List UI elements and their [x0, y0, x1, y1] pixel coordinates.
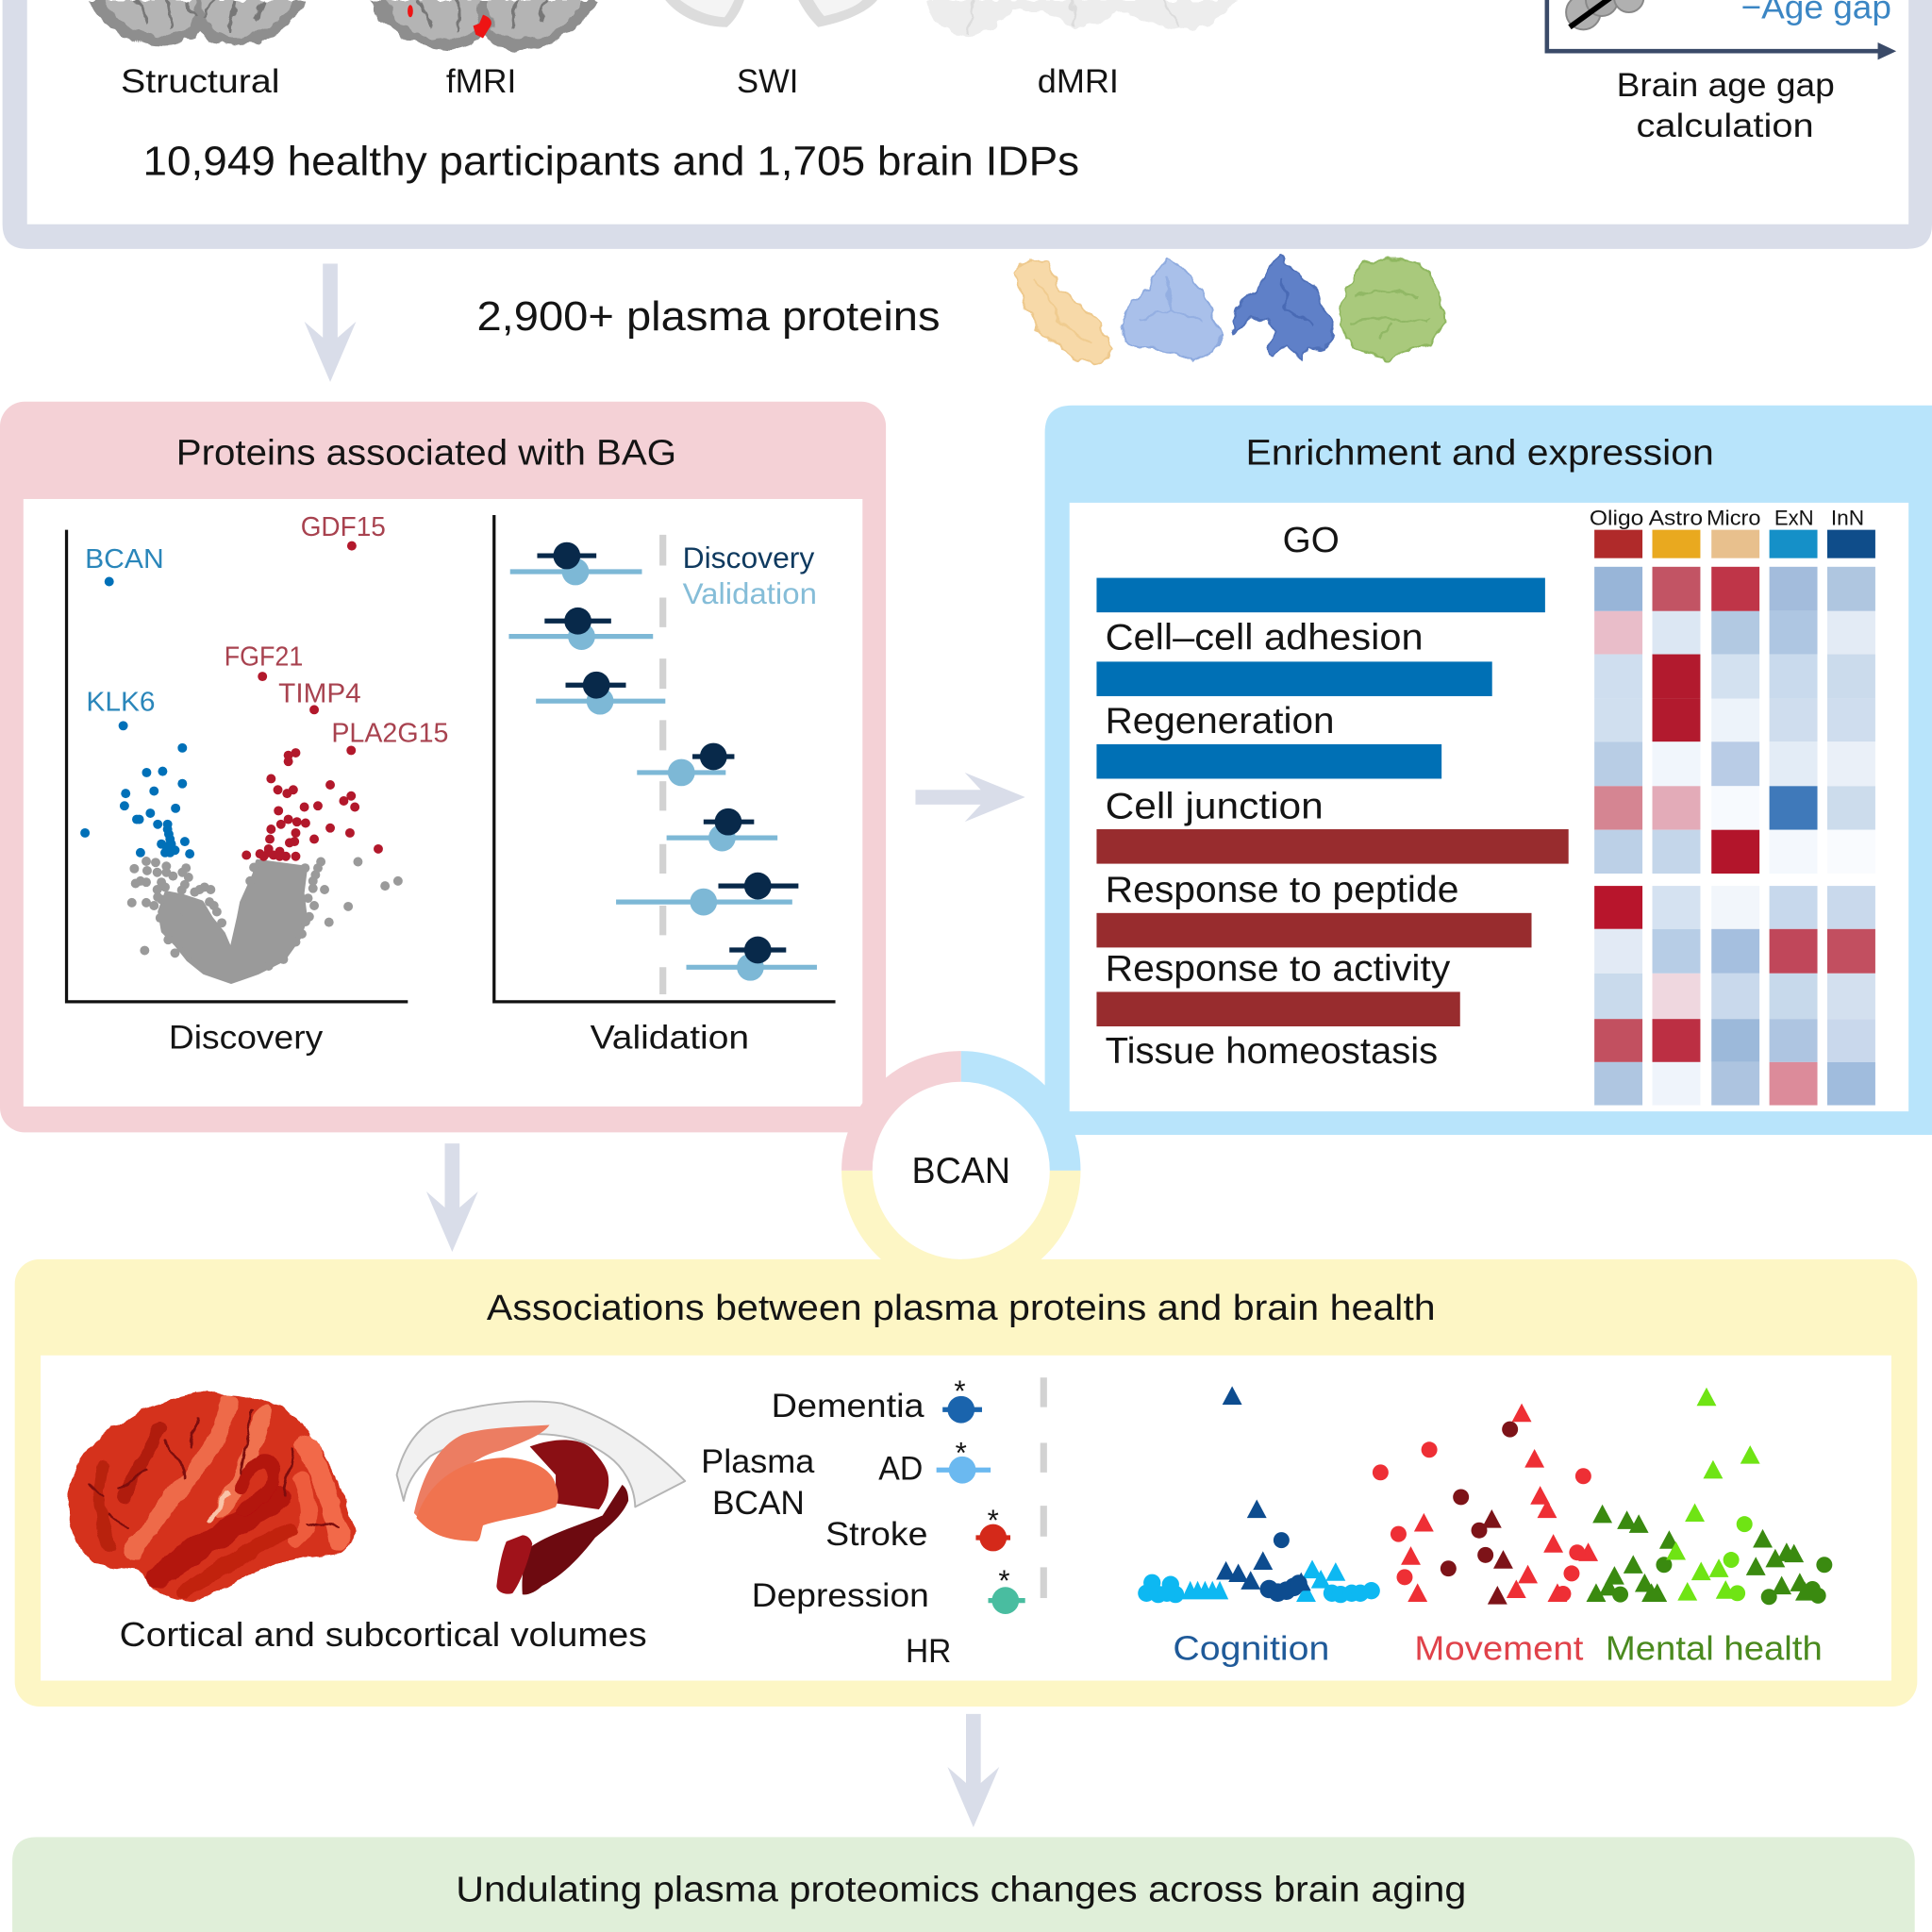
- label: plasma BCAN: [701, 1443, 815, 1522]
- bar chart: GO terms: Response to peptide: [1106, 870, 1458, 910]
- panel: proteins associated with BAG: [0, 402, 886, 1132]
- arrow: to enrichment: [915, 773, 1025, 822]
- label: SWI: SWI: [737, 63, 798, 100]
- caption: cortical and subcortical volumes: Cortical and subcortical volumes: [120, 1615, 647, 1654]
- category labels: Cognition: [1173, 1628, 1329, 1667]
- label: dMRI: dMRI: [1038, 63, 1119, 100]
- chart: volcano plot: [67, 512, 448, 1002]
- column labels: [1590, 506, 1864, 529]
- row: AD: [878, 1436, 991, 1488]
- legend: Discovery: [683, 541, 815, 575]
- callout: BCAN ring: [857, 1066, 1065, 1274]
- label: plasma BCAN: BCAN: [712, 1485, 805, 1522]
- label: HR: HR: [906, 1633, 951, 1670]
- label: brain age gap calculation: calculation: [1637, 108, 1814, 144]
- panel: enrichment and expression: [1045, 406, 1932, 1135]
- blue points: [80, 577, 194, 858]
- heading: GO: GO: [1283, 521, 1340, 560]
- column labels: Astro: [1649, 506, 1703, 529]
- gene labels: PLA2G15: [331, 718, 448, 748]
- arrow: to associations: [426, 1143, 478, 1252]
- label: brain age gap calculation: [1617, 67, 1835, 144]
- column swatches: [1594, 530, 1875, 558]
- bar chart: GO terms: Cell–cell adhesion: [1106, 617, 1424, 658]
- gray points: [127, 857, 403, 981]
- bar chart: GO terms: Tissue homeostasis: [1106, 1031, 1438, 1072]
- column labels: InN: [1831, 506, 1864, 529]
- row: stroke: *: [988, 1504, 999, 1537]
- row: dementia: Dementia: [772, 1388, 924, 1424]
- bar chart: GO terms: Regeneration: [1106, 701, 1335, 741]
- movement points: [1373, 1404, 1598, 1605]
- arrow: to proteomics changes: [947, 1714, 999, 1827]
- category labels: Mental health: [1606, 1628, 1823, 1667]
- column labels: Oligo: [1590, 506, 1643, 529]
- icon: subcortical structures: [397, 1402, 685, 1594]
- text: participants and IDPs: 10,949 healthy participants and 1,705 brain IDPs: [143, 139, 1079, 184]
- validation estimates: [508, 558, 817, 981]
- category labels: Movement: [1414, 1628, 1583, 1667]
- icon: cortical brain: [67, 1393, 354, 1602]
- red points: [242, 541, 383, 861]
- gene labels: FGF21: [225, 641, 303, 672]
- gene labels: GDF15: [301, 512, 386, 542]
- legend: [683, 541, 817, 610]
- label: Structural: Structural: [121, 63, 279, 100]
- heading: enrichment: Enrichment and expression: [1245, 433, 1714, 473]
- row: stroke: Stroke: [825, 1516, 928, 1553]
- discovery estimates: [537, 542, 798, 963]
- row: depression: [752, 1564, 1025, 1614]
- bar chart: GO terms: Response to activity: [1106, 949, 1451, 990]
- row: AD: AD: [878, 1451, 923, 1488]
- icon: structural brain: [89, 0, 305, 45]
- bar chart: GO terms: [1096, 578, 1569, 1072]
- icon: protein molecules: [1015, 258, 1442, 362]
- text: plasma proteins: 2,900+ plasma proteins: [476, 294, 941, 340]
- row: depression: Depression: [752, 1577, 929, 1614]
- label: brain age gap calculation: Brain age gap: [1617, 67, 1835, 104]
- chart: plasma BCAN hazard ratios: [701, 1374, 1043, 1670]
- row: dementia: *: [954, 1374, 966, 1407]
- chart: brain age gap: [1547, 0, 1896, 59]
- arrow: imaging to proteins: [305, 264, 356, 382]
- label: plasma BCAN: Plasma: [701, 1443, 815, 1480]
- label: Validation axis: Validation: [591, 1020, 749, 1057]
- heading: proteins associated: Proteins associated with BAG: [176, 433, 676, 473]
- gene labels: [85, 512, 448, 748]
- gene labels: TIMP4: [278, 678, 361, 708]
- icon: fMRI brain: [370, 0, 596, 51]
- icon: SWI brain: [665, 0, 877, 27]
- heatmap: cell type expression: [1590, 506, 1875, 1106]
- heading: associations: Associations between plasma proteins and brain health: [487, 1289, 1436, 1328]
- column labels: Micro: [1707, 506, 1760, 529]
- gene labels: BCAN: [85, 544, 164, 575]
- column labels: ExN: [1774, 506, 1814, 529]
- chart: phenotype scatter: [1138, 1386, 1832, 1667]
- gene labels: KLK6: [86, 688, 156, 718]
- callout: BCAN ring: BCAN: [912, 1151, 1010, 1191]
- heading: undulating changes: Undulating plasma proteomics changes across brain aging: [456, 1870, 1466, 1909]
- category labels: [1173, 1628, 1823, 1667]
- label: Discovery axis: Discovery: [169, 1020, 324, 1057]
- panel: imaging data: [3, 0, 1932, 249]
- label: fMRI: fMRI: [446, 63, 516, 100]
- mental health points: [1587, 1388, 1832, 1605]
- legend: Validation: [683, 577, 817, 610]
- row: depression: *: [998, 1564, 1010, 1597]
- panel: associations with brain health: [15, 1259, 1917, 1707]
- chart: validation forest plot: [494, 515, 836, 1002]
- icon: dMRI brain: [924, 0, 1239, 36]
- bar chart: GO terms: Cell junction: [1106, 786, 1324, 826]
- panel: undulating proteomics changes: [12, 1837, 1915, 1932]
- cognition points: [1138, 1386, 1380, 1603]
- row: dementia: [772, 1374, 982, 1424]
- row: stroke: [825, 1504, 1010, 1553]
- row: AD: *: [956, 1436, 967, 1469]
- heatmap cells: [1594, 567, 1875, 1106]
